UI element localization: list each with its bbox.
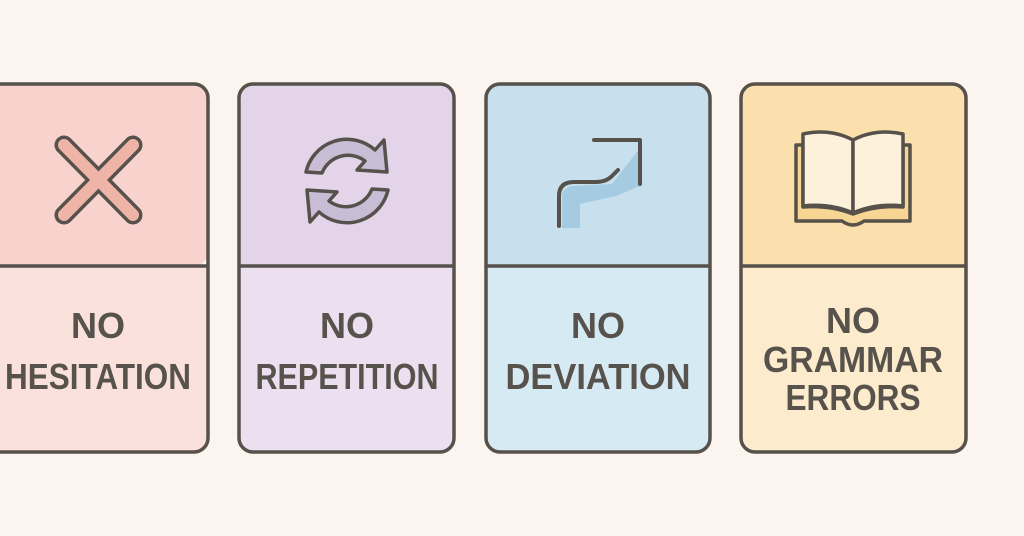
text: no repetition: REPETITION — [256, 356, 438, 397]
text: no deviation: NO — [571, 305, 625, 346]
panel: no grammar errors — [741, 84, 966, 452]
text: no grammar errors: NO — [826, 300, 880, 341]
text: no grammar errors: GRAMMAR — [763, 339, 943, 380]
text: no grammar errors: ERRORS — [786, 377, 920, 418]
text: no deviation: DEVIATION — [506, 356, 690, 397]
icon: deviation arrow — [559, 140, 640, 228]
panel: no repetition — [239, 84, 454, 452]
icon: cross — [64, 145, 133, 215]
text: no hesitation: HESITATION — [5, 356, 191, 397]
panel: no hesitation — [0, 84, 208, 452]
panel: no deviation — [486, 84, 710, 452]
text: no grammar errors — [763, 300, 943, 418]
icon: refresh arrows — [306, 139, 388, 223]
text: no deviation — [506, 305, 690, 397]
text: no hesitation: NO — [71, 305, 125, 346]
icon: open book — [796, 132, 910, 225]
text: no repetition — [256, 305, 438, 397]
text: no repetition: NO — [320, 305, 374, 346]
text: no hesitation — [5, 305, 191, 397]
